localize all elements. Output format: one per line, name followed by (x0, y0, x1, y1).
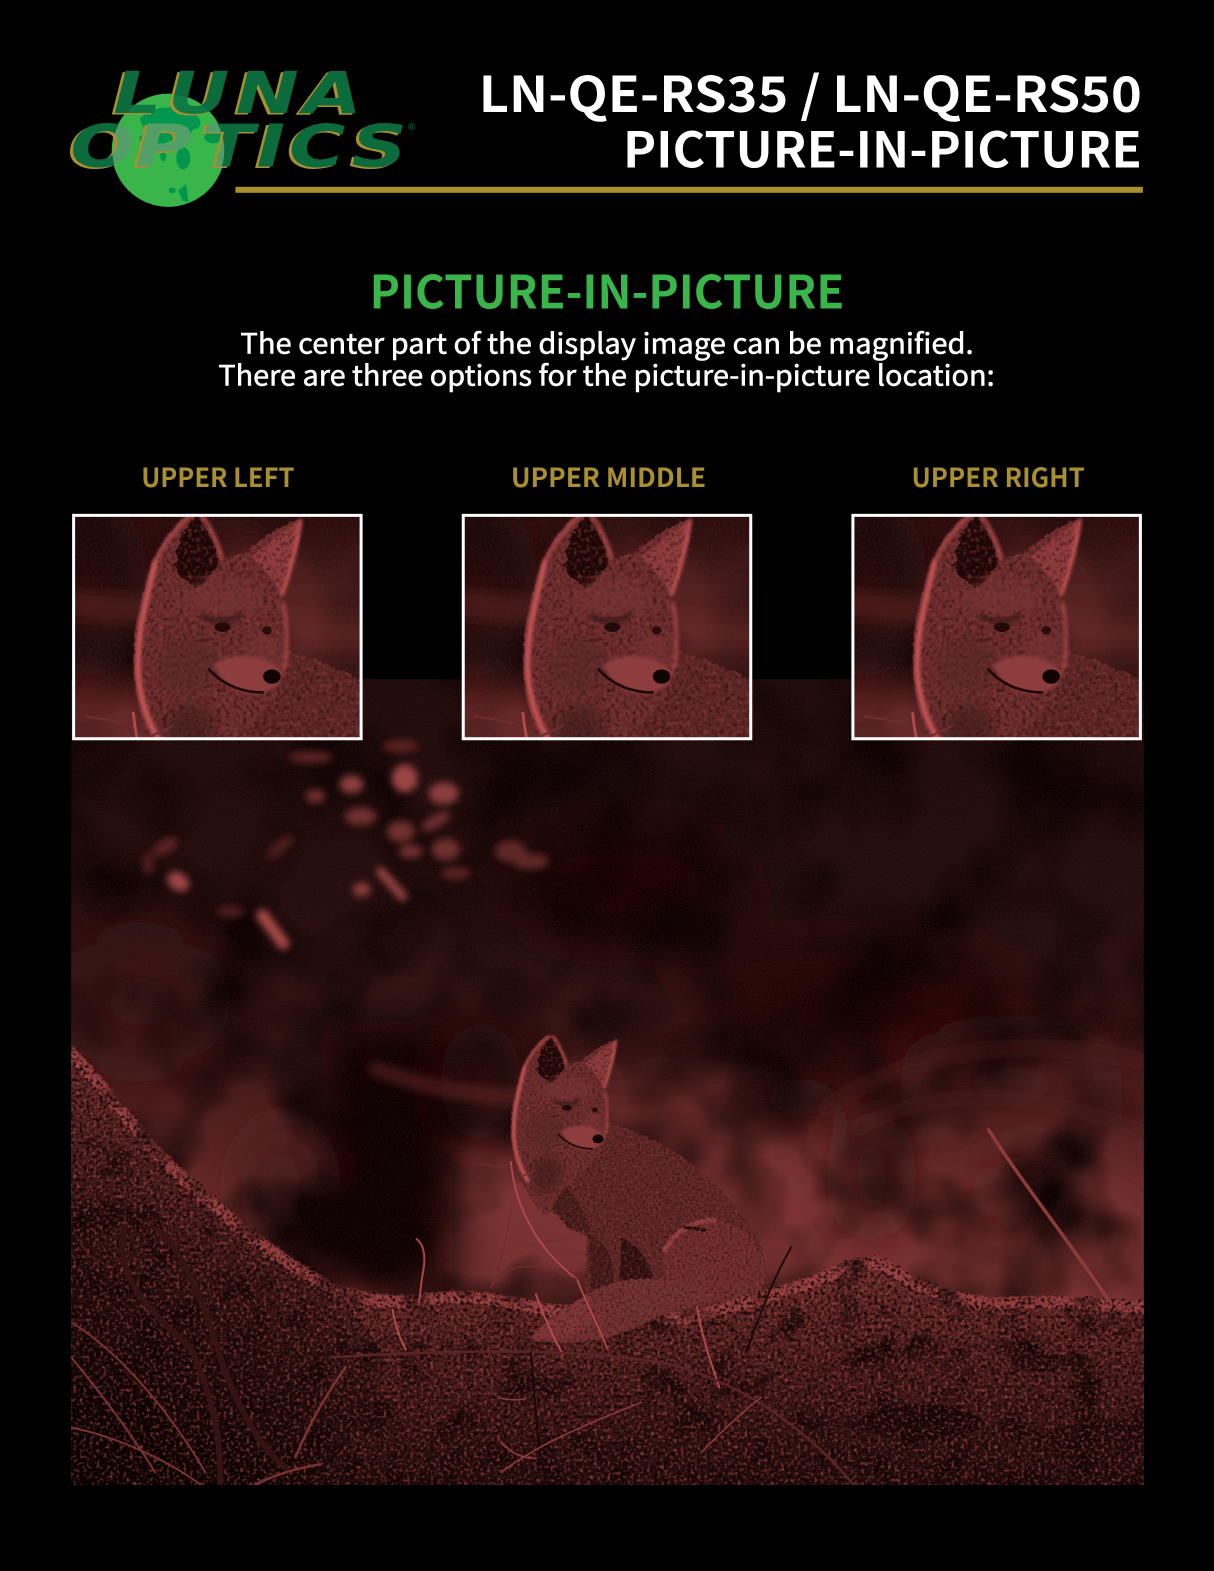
fox body (511, 1077, 766, 1322)
twigs and branches (71, 1130, 1108, 1484)
logo globe (112, 94, 225, 207)
fox face details (514, 1036, 616, 1192)
logo wordmark: OPTICS: OPTICS (70, 112, 407, 181)
title: PICTURE-IN-PICTURE (623, 111, 1142, 182)
thumbnail: upper right (851, 514, 1142, 740)
blurred foliage highlights (142, 740, 549, 944)
logo wordmark: LUNA: LUNA (110, 60, 359, 128)
header rule (235, 187, 1143, 193)
fox head (511, 1035, 616, 1217)
logo wordmark: OPTICS: OPTICS (67, 113, 404, 182)
label: upper left: UPPER LEFT (141, 458, 294, 495)
thumbnail: upper middle (462, 514, 752, 740)
label: upper middle: UPPER MIDDLE (511, 458, 706, 495)
fox tail (531, 1277, 690, 1344)
logo wordmark: LUNA: LUNA (113, 59, 362, 127)
thumbnail: upper left (72, 514, 363, 740)
description text (218, 322, 995, 395)
section heading: PICTURE-IN-PICTURE (370, 257, 844, 323)
blurred background branches (371, 1048, 1144, 1132)
registered mark: ® (408, 122, 416, 133)
title: LN-QE-RS35 / LN-QE-RS50 (479, 56, 1142, 127)
tree root and mossy ground (60, 1038, 1172, 1492)
description text: The center part of the display image can be magnified. (240, 322, 974, 363)
title (479, 56, 1142, 182)
logo: Luna Optics (67, 59, 416, 207)
description text: There are three options for the picture-in-picture location: (218, 354, 995, 395)
main night-vision photo (71, 679, 1144, 1485)
label: upper right: UPPER RIGHT (912, 458, 1085, 495)
